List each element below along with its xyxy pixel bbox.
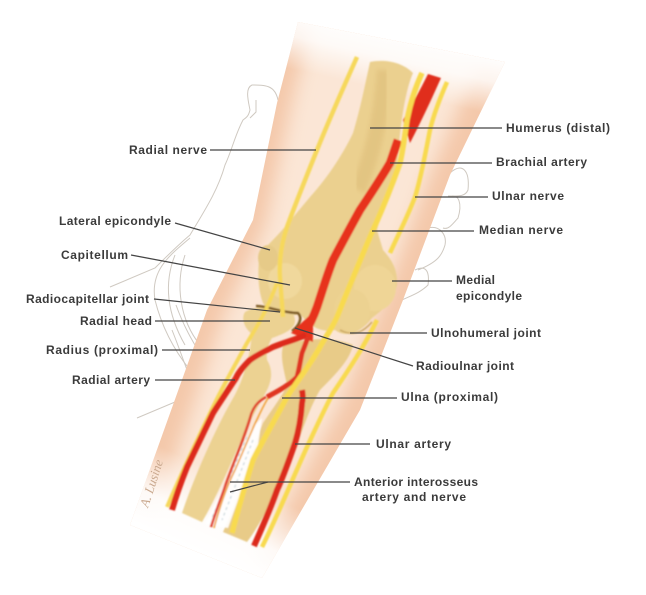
label: capitellum: Capitellum <box>61 248 128 262</box>
label: anterior interosseus artery and nerve: Anterior interosseus <box>354 475 478 489</box>
label: medial epicondyle: epicondyle <box>456 289 522 303</box>
label: radial artery: Radial artery <box>72 373 150 387</box>
label: radius proximal: Radius (proximal) <box>46 343 158 357</box>
label: brachial artery: Brachial artery <box>496 155 587 169</box>
nerve: ulnar <box>390 82 447 253</box>
nerve: median <box>232 73 422 533</box>
signature: A. Lusine <box>136 457 166 510</box>
bone: humerus distal <box>258 61 413 334</box>
artery: ulnar <box>254 390 303 546</box>
artery and nerve: anterior interosseus <box>211 397 266 527</box>
illustration: arm skin <box>130 22 505 578</box>
artery: ulnar branch <box>267 337 308 397</box>
icon: hand outline sketch <box>110 85 468 418</box>
label: medial epicondyle <box>456 273 522 303</box>
label: medial epicondyle: Medial <box>456 273 495 287</box>
label: ulna proximal: Ulna (proximal) <box>401 390 498 404</box>
label: radiocapitellar joint: Radiocapitellar joint <box>26 292 149 306</box>
bone: radius <box>182 307 295 522</box>
label: median nerve: Median nerve <box>479 223 563 237</box>
labels <box>26 121 610 504</box>
artery: brachial <box>403 74 441 143</box>
artery: radial <box>172 335 306 510</box>
nerve: radial <box>280 57 357 317</box>
label: ulnar artery: Ulnar artery <box>376 437 451 451</box>
joint shadow <box>256 306 300 331</box>
label: lateral epicondyle: Lateral epicondyle <box>59 214 171 228</box>
bone: condyle highlights <box>354 265 396 311</box>
label: radial nerve: Radial nerve <box>129 143 207 157</box>
label: ulnar nerve: Ulnar nerve <box>492 189 564 203</box>
label lines <box>131 128 502 492</box>
label: radioulnar joint: Radioulnar joint <box>416 359 514 373</box>
label: anterior interosseus artery and nerve: artery and nerve <box>362 490 466 504</box>
label: radial head: Radial head <box>80 314 152 328</box>
bone: ulna <box>223 339 353 542</box>
illustration: bones, nerves and arteries <box>167 57 447 547</box>
label: anterior interosseus artery and nerve <box>354 475 478 504</box>
label: humerus distal: Humerus (distal) <box>506 121 610 135</box>
label: ulnohumeral joint: Ulnohumeral joint <box>431 326 541 340</box>
gap: interosseous membrane <box>205 418 262 528</box>
